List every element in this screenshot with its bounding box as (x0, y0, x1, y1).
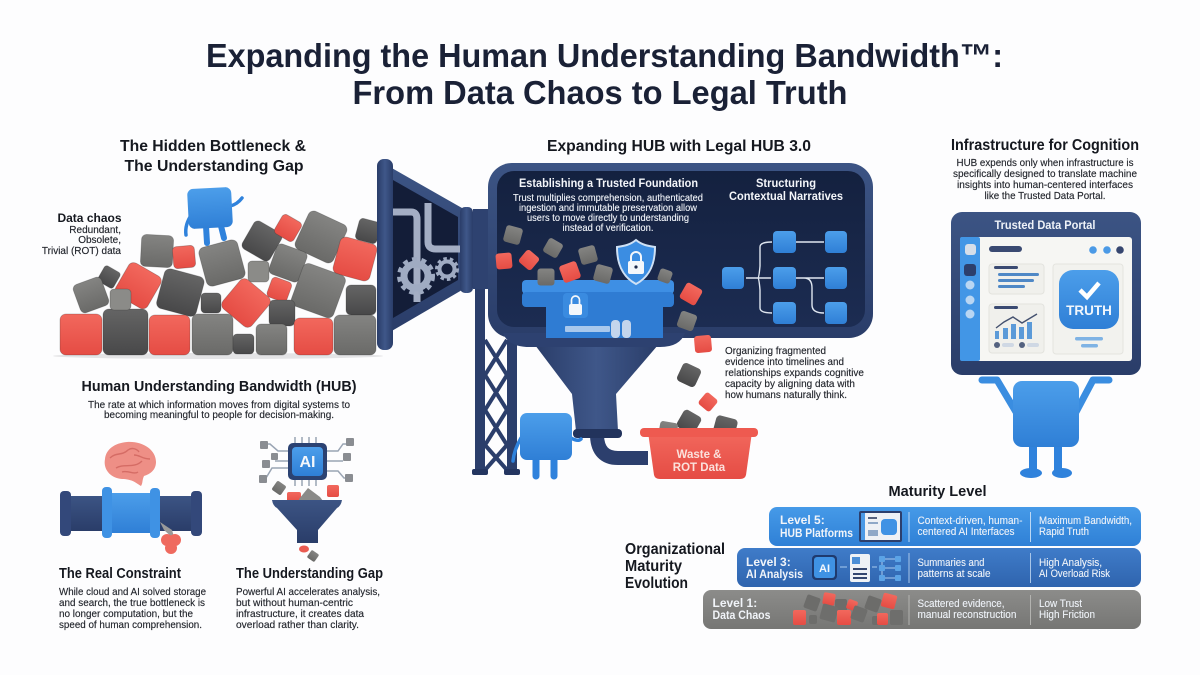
heading: organizational maturity evolution: Maturity (625, 558, 682, 575)
text: trusted foundation: ingestion and immutable preservation allow (519, 202, 697, 214)
panel: level 1 bar: Level 1: (712, 596, 757, 610)
heading and text: infrastructure for cognition: insights into human-centered interfaces (957, 179, 1133, 191)
text: organizing evidence (725, 345, 864, 401)
illustration: pile of data chaos blocks (53, 209, 383, 359)
title (206, 37, 1003, 111)
panel: level 1 bar: Low Trust (1039, 598, 1082, 610)
heading and text: human understanding bandwidth: Human Understanding Bandwidth (HUB) (82, 378, 356, 395)
diagram: narrative tree (722, 231, 847, 324)
heading and text: infrastructure for cognition: Infrastructure for Cognition (951, 137, 1139, 154)
icon: mini portal (859, 511, 902, 542)
text: organizing evidence: how humans naturally think. (725, 389, 847, 401)
panel: trusted data portal: Trusted Data Portal (994, 220, 1096, 232)
panel: trusted data portal (951, 212, 1141, 375)
text: the understanding gap: but without human-centric (236, 597, 353, 609)
illustration: red waste bin: ROT Data (673, 462, 726, 474)
icon: character holding portal (982, 380, 1109, 478)
title: Expanding the Human Understanding Bandwidth™: (206, 37, 1003, 74)
panel: level 5 bar: centered AI Interfaces (918, 526, 1015, 538)
text: contextual narratives (729, 176, 843, 203)
text: the real constraint: no longer computation, but the (59, 608, 193, 620)
text: the understanding gap (236, 566, 383, 631)
panel: level 3 bar: patterns at scale (918, 568, 990, 580)
panel: trusted data portal: TRUTH (1066, 303, 1112, 318)
illustration: cubes dropping into bin (658, 335, 738, 441)
text: data chaos label: Trivial (ROT) data (42, 246, 121, 257)
panel: level 3 bar (737, 548, 1141, 587)
panel: level 5 bar: Rapid Truth (1039, 526, 1089, 538)
text: the real constraint: While cloud and AI solved storage (59, 586, 206, 598)
illustration: red waste bin: Waste & (677, 449, 721, 461)
illustration: hopper funnel and outflow pipe (535, 345, 658, 458)
text: organizing evidence: capacity by aligning data with (725, 378, 855, 390)
heading: expanding HUB: Expanding HUB with Legal HUB 3.0 (547, 138, 811, 155)
panel: level 1 bar: High Friction (1039, 609, 1095, 621)
heading and text: infrastructure for cognition: HUB expends only when infrastructure is (956, 157, 1134, 169)
text: the real constraint (59, 566, 206, 631)
text: trusted foundation (513, 176, 703, 234)
panel: level 3 bar: Level 3: (746, 555, 791, 569)
illustration: data intake horn with pipes and gears (377, 159, 491, 350)
heading: organizational maturity evolution (625, 541, 725, 592)
text: data chaos label: Obsolete, (78, 235, 121, 246)
panel: level 5 bar: Level 5: (780, 513, 825, 527)
text: trusted foundation: Trust multiplies comprehension, authenticated (513, 192, 703, 204)
icon: brain (105, 442, 156, 486)
illustration: cubes falling through chamber (495, 225, 703, 332)
icon: AI analysis flow: AI (819, 563, 830, 575)
heading and text: human understanding bandwidth: becoming meaningful to people for decision-making. (104, 409, 334, 421)
heading: organizational maturity evolution: Organizational (625, 541, 725, 558)
heading: hidden bottleneck (120, 138, 306, 175)
panel: level 1 bar: Data Chaos (712, 608, 771, 622)
icon: blue character beside funnel (513, 413, 581, 476)
heading and text: infrastructure for cognition: specifically designed to translate machine (953, 168, 1137, 180)
panel: level 5 bar: HUB Platforms (780, 526, 853, 540)
icon: security shield (617, 240, 655, 284)
text: the understanding gap: infrastructure, it creates data (236, 608, 364, 620)
panel: level 1 bar (703, 590, 1141, 629)
illustration: red waste bin (640, 428, 758, 479)
text: the real constraint: The Real Constraint (59, 566, 181, 582)
text: trusted foundation: Establishing a Trusted Foundation (519, 176, 698, 190)
illustration: constrained pipe (60, 487, 202, 554)
panel: level 5 bar: Context-driven, human- (918, 515, 1023, 527)
text: the understanding gap: overload rather than clarity. (236, 619, 359, 631)
heading and text: infrastructure for cognition: like the Trusted Data Portal. (984, 190, 1106, 202)
panel: legal HUB chamber (488, 163, 873, 347)
text: trusted foundation: instead of verification. (562, 222, 654, 234)
text: the understanding gap: Powerful AI accelerates analysis, (236, 586, 380, 598)
text: organizing evidence: Organizing fragmented (725, 345, 826, 357)
text: the real constraint: and search, the true bottleneck is (59, 597, 205, 609)
heading: organizational maturity evolution: Evolution (625, 575, 688, 592)
icon: blue character on blocks (186, 187, 242, 243)
icon: AI analysis flow (812, 554, 901, 582)
text: organizing evidence: relationships expands cognitive (725, 367, 864, 379)
panel: level 5 bar (769, 507, 1141, 546)
panel: level 1 bar: manual reconstruction (918, 609, 1016, 621)
heading and text: human understanding bandwidth (82, 378, 356, 421)
panel: level 3 bar: AI Overload Risk (1039, 568, 1110, 580)
text: data chaos label: Data chaos (57, 211, 122, 225)
heading and text: infrastructure for cognition (951, 137, 1139, 202)
text: organizing evidence: evidence into timelines and (725, 356, 844, 368)
panel: level 3 bar: AI Analysis (746, 567, 803, 581)
text: contextual narratives: Contextual Narratives (729, 189, 843, 203)
heading: maturity level: Maturity Level (888, 484, 986, 500)
text: data chaos label (42, 211, 122, 257)
icon: AI chip with funnel (259, 437, 354, 562)
text: the understanding gap: The Understanding Gap (236, 566, 383, 582)
panel: level 3 bar: Summaries and (918, 557, 984, 569)
icon: AI chip with funnel: AI (300, 454, 316, 471)
heading and text: human understanding bandwidth: The rate at which information moves from digital systems to (88, 399, 350, 411)
text: the real constraint: speed of human comprehension. (59, 619, 202, 631)
panel: level 1 bar: Scattered evidence, (918, 598, 1004, 610)
title: From Data Chaos to Legal Truth (352, 74, 848, 111)
text: data chaos label: Redundant, (69, 225, 121, 236)
heading: hidden bottleneck: The Hidden Bottleneck & (120, 138, 306, 155)
panel: level 5 bar: Maximum Bandwidth, (1039, 515, 1132, 527)
illustration: locked preservation machine (522, 280, 674, 338)
heading: hidden bottleneck: The Understanding Gap (124, 158, 304, 175)
illustration: support scaffold (472, 289, 520, 475)
icon: mini chaos blocks (793, 592, 903, 625)
text: trusted foundation: users to move directly to understanding (527, 212, 689, 224)
text: contextual narratives: Structuring (756, 176, 816, 190)
panel: level 3 bar: High Analysis, (1039, 557, 1102, 569)
